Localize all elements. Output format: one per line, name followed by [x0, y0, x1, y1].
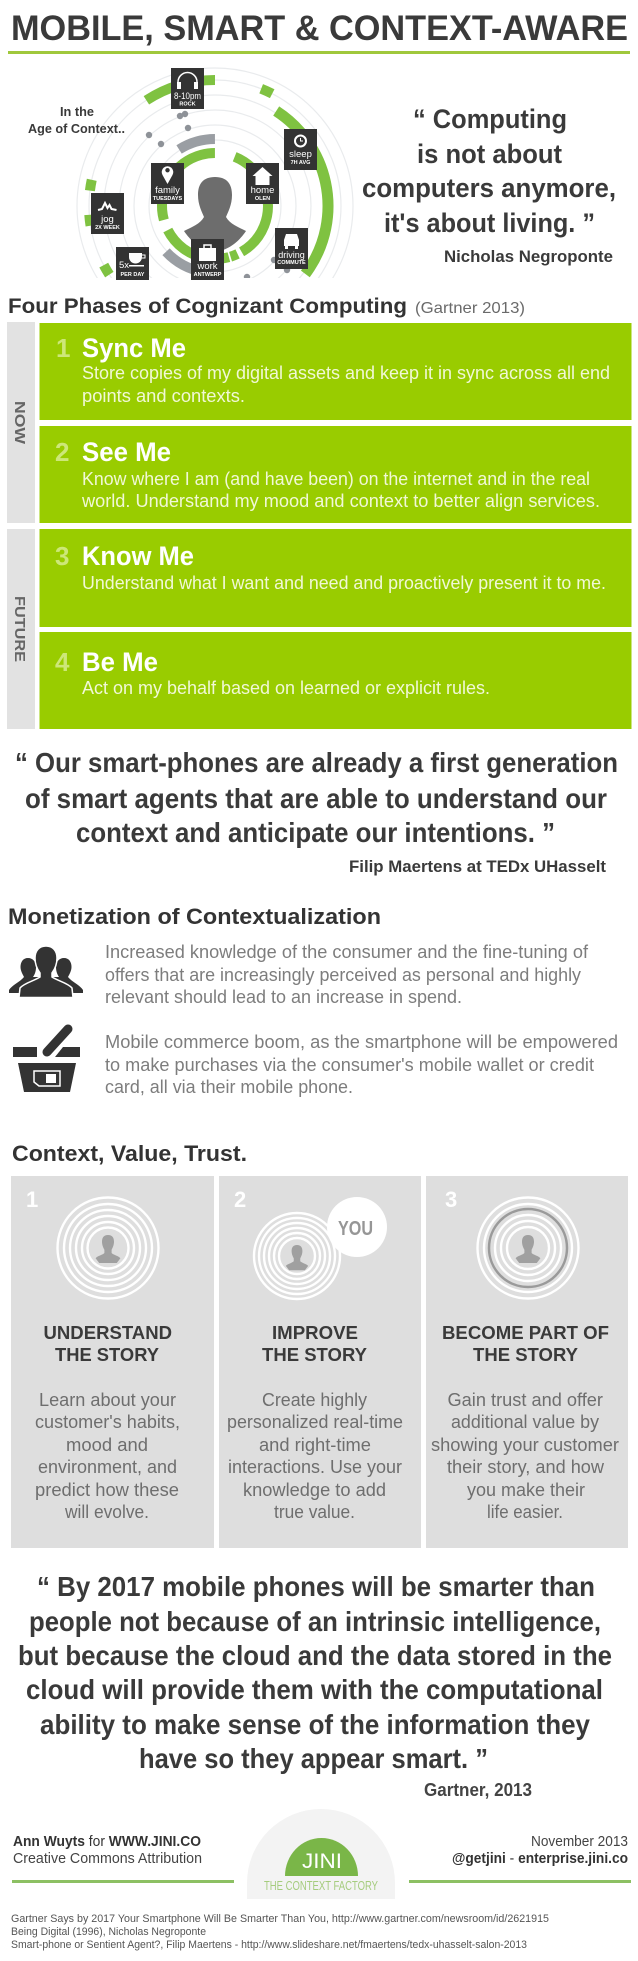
panel: see me: See Me — [82, 437, 171, 467]
panel: understand: 1 — [26, 1187, 38, 1212]
footer dome — [247, 1809, 395, 1899]
panel: know me: Understand what I want and need and proactively present it to me. — [82, 573, 606, 593]
panel: know me: Know Me — [82, 541, 194, 571]
text: spend: Increased knowledge of the consumer and the fine-tuning of — [105, 942, 589, 962]
panel: become part: life easier. — [487, 1502, 563, 1522]
panel: understand: predict how these — [35, 1480, 179, 1500]
panel: become part: Gain trust and offer — [448, 1390, 603, 1410]
panel: understand: environment, and — [38, 1457, 177, 1477]
credit left — [13, 1833, 202, 1867]
tile: jog: jog — [100, 214, 114, 225]
panel: become part: their story, and how — [447, 1457, 605, 1477]
panel: understand: THE STORY — [55, 1345, 159, 1365]
tile: sleep: sleep — [289, 149, 312, 160]
tile: home: home — [251, 185, 274, 196]
panel: understand: will evolve. — [64, 1502, 149, 1522]
panel: improve: Create highly — [262, 1390, 367, 1410]
panel: see me: Know where I am (and have been) on the internet and in the real — [82, 469, 590, 489]
panel: become part: you make their — [467, 1480, 585, 1500]
panel: improve — [219, 1176, 421, 1548]
icon: people — [9, 946, 83, 998]
credit left: Creative Commons Attribution — [13, 1850, 202, 1867]
heading: four phases: Four Phases of Cognizant Computing — [8, 295, 407, 318]
credit right — [452, 1833, 628, 1867]
panel: improve: interactions. Use your — [228, 1457, 402, 1477]
tile: coffee: PER DAY — [121, 272, 145, 278]
credit right: November 2013 — [531, 1833, 628, 1850]
quote source: Gartner, 2013 — [424, 1780, 532, 1800]
references: Smart-phone or Sentient Agent?, Filip Maertens - http://www.slideshare.net/fmaertens/tedx-uhasselt-salon-2013 — [11, 1939, 527, 1951]
panel: see me — [40, 426, 632, 523]
text: spend: relevant should lead to an increase in spend. — [105, 987, 462, 1007]
tile: family: TUESDAYS — [153, 196, 183, 202]
panel: sync me: 1 — [56, 333, 70, 363]
panel: understand — [11, 1176, 214, 1548]
panel: see me: world. Understand my mood and context to better align services. — [81, 491, 600, 511]
tile: family: family — [155, 185, 180, 196]
quote: Gartner: ability to make sense of the information they — [40, 1709, 590, 1740]
panel: understand: Learn about your — [39, 1390, 176, 1410]
diagram caption: Age of Context.. — [28, 121, 125, 136]
quote: Maertens — [15, 747, 618, 876]
panel: sync me — [40, 323, 632, 420]
footer rule right — [409, 1880, 631, 1883]
panel: become part: showing your customer — [431, 1435, 619, 1455]
quote: Negroponte: it's about living. ” — [384, 208, 595, 238]
panel: improve: true value. — [274, 1502, 355, 1522]
tile: rock: ROCK — [179, 102, 196, 108]
tile: work — [191, 239, 224, 280]
sidebar: future: FUTURE — [11, 596, 28, 662]
diagram caption — [28, 104, 125, 136]
panel: become part: additional value by — [451, 1412, 599, 1432]
quote: Gartner: have so they appear smart. ” — [139, 1743, 488, 1774]
tile: jog — [91, 193, 124, 234]
context diagram — [76, 68, 354, 280]
text: spend — [105, 942, 589, 1007]
panel: be me — [40, 632, 632, 729]
tile: coffee — [116, 247, 149, 280]
text: commerce: to make purchases via the consumer's mobile wallet or credit — [105, 1055, 594, 1075]
panel: sync me: Store copies of my digital assets and keep it in sync across all end — [82, 363, 610, 383]
quote: Maertens: Filip Maertens at TEDx UHasselt — [349, 857, 606, 876]
tile: rock: 8-10pm — [174, 91, 201, 101]
panel: be me: Act on my behalf based on learned or explicit rules. — [82, 678, 490, 698]
panel: know me: 3 — [55, 541, 69, 571]
tile: jog: 2X WEEK — [95, 225, 120, 231]
tile: work: ANTWERP — [194, 272, 222, 278]
icon: rings 1 — [58, 1198, 158, 1298]
heading: monetization: Monetization of Contextualization — [8, 904, 381, 929]
quote: Negroponte: is not about — [417, 139, 562, 169]
tile: driving — [275, 228, 308, 269]
text: spend: offers that are increasingly perceived as personal and highly — [105, 965, 581, 985]
tile: coffee: 5x — [119, 260, 129, 271]
references: Being Digital (1996), Nicholas Negroponte — [11, 1926, 206, 1938]
sidebar: future — [7, 529, 35, 729]
references: Gartner Says by 2017 Your Smartphone Will Be Smarter Than You, http://www.gartner.com/newsroom/id/2621915 — [11, 1913, 549, 1925]
tile: sleep: 7H AVG — [291, 160, 310, 166]
panel: understand: UNDERSTAND — [44, 1323, 172, 1343]
logo — [264, 1838, 378, 1893]
panel: improve: IMPROVE — [272, 1323, 358, 1343]
quote: Gartner — [18, 1571, 612, 1774]
quote: Gartner: people not because of an intrinsic intelligence, — [29, 1606, 601, 1637]
quote: Gartner: cloud will provide them with the computational — [26, 1674, 603, 1705]
quote: Negroponte: “ Computing — [413, 104, 567, 134]
title: MOBILE, SMART & CONTEXT-AWARE — [11, 9, 628, 48]
text: commerce — [105, 1032, 618, 1097]
panel: know me — [40, 529, 632, 627]
panel: improve: THE STORY — [262, 1345, 367, 1365]
panel: understand: mood and — [66, 1435, 148, 1455]
footer rule left — [12, 1880, 234, 1883]
panel: become part: 3 — [445, 1187, 457, 1212]
icon: rings 3 — [478, 1198, 578, 1298]
quote: Gartner: “ By 2017 mobile phones will be smarter than — [37, 1571, 595, 1602]
tile: driving: COMMUTE — [277, 260, 306, 266]
tile: work: work — [196, 261, 218, 272]
quote: Negroponte: computers anymore, — [362, 173, 616, 203]
panel: see me: 2 — [55, 437, 69, 467]
panel: improve: 2 — [234, 1187, 246, 1212]
title rule — [8, 51, 630, 54]
quote: Maertens: of smart agents that are able to understand our — [25, 783, 607, 814]
credit left: Ann Wuyts for WWW.JINI.CO — [13, 1833, 201, 1850]
references — [11, 1913, 549, 1951]
icon: basket — [13, 1029, 80, 1092]
quote: Maertens: context and anticipate our intentions. ” — [76, 817, 555, 848]
tile: sleep — [284, 129, 317, 170]
panel: improve: personalized real-time — [227, 1412, 403, 1432]
panel: sync me: points and contexts. — [82, 386, 245, 406]
panel: understand: customer's habits, — [35, 1412, 180, 1432]
heading: four phases: (Gartner 2013) — [415, 300, 525, 317]
tile: home — [246, 163, 279, 204]
icon: rings 2: YOU — [338, 1218, 373, 1240]
credit right: @getjini - enterprise.jini.co — [452, 1850, 628, 1867]
tile: rock — [171, 68, 204, 109]
tile: driving: driving — [278, 250, 305, 260]
quote: Negroponte — [362, 104, 616, 266]
panel: become part: BECOME PART OF — [442, 1323, 609, 1343]
sidebar: now: NOW — [11, 401, 28, 445]
quote: Negroponte: Nicholas Negroponte — [444, 247, 613, 266]
text: commerce: Mobile commerce boom, as the smartphone will be empowered — [105, 1032, 618, 1052]
text: commerce: card, all via their mobile phone. — [105, 1077, 353, 1097]
panel: sync me: Sync Me — [82, 333, 186, 363]
panel: be me: 4 — [55, 647, 70, 677]
icon: rings 2 — [254, 1197, 387, 1299]
panel: become part: THE STORY — [473, 1345, 578, 1365]
panel: improve: knowledge to add — [243, 1480, 386, 1500]
sidebar: now — [7, 322, 35, 523]
panel: become part — [426, 1176, 628, 1548]
logo: JINI — [302, 1850, 342, 1873]
heading: context value trust: Context, Value, Trust. — [12, 1141, 247, 1166]
tile: home: OLEN — [255, 196, 270, 202]
panel: improve: and right-time — [259, 1435, 371, 1455]
diagram caption: In the — [60, 104, 94, 119]
logo: THE CONTEXT FACTORY — [264, 1879, 378, 1893]
panel: be me: Be Me — [82, 647, 158, 677]
tile: family — [151, 163, 184, 204]
